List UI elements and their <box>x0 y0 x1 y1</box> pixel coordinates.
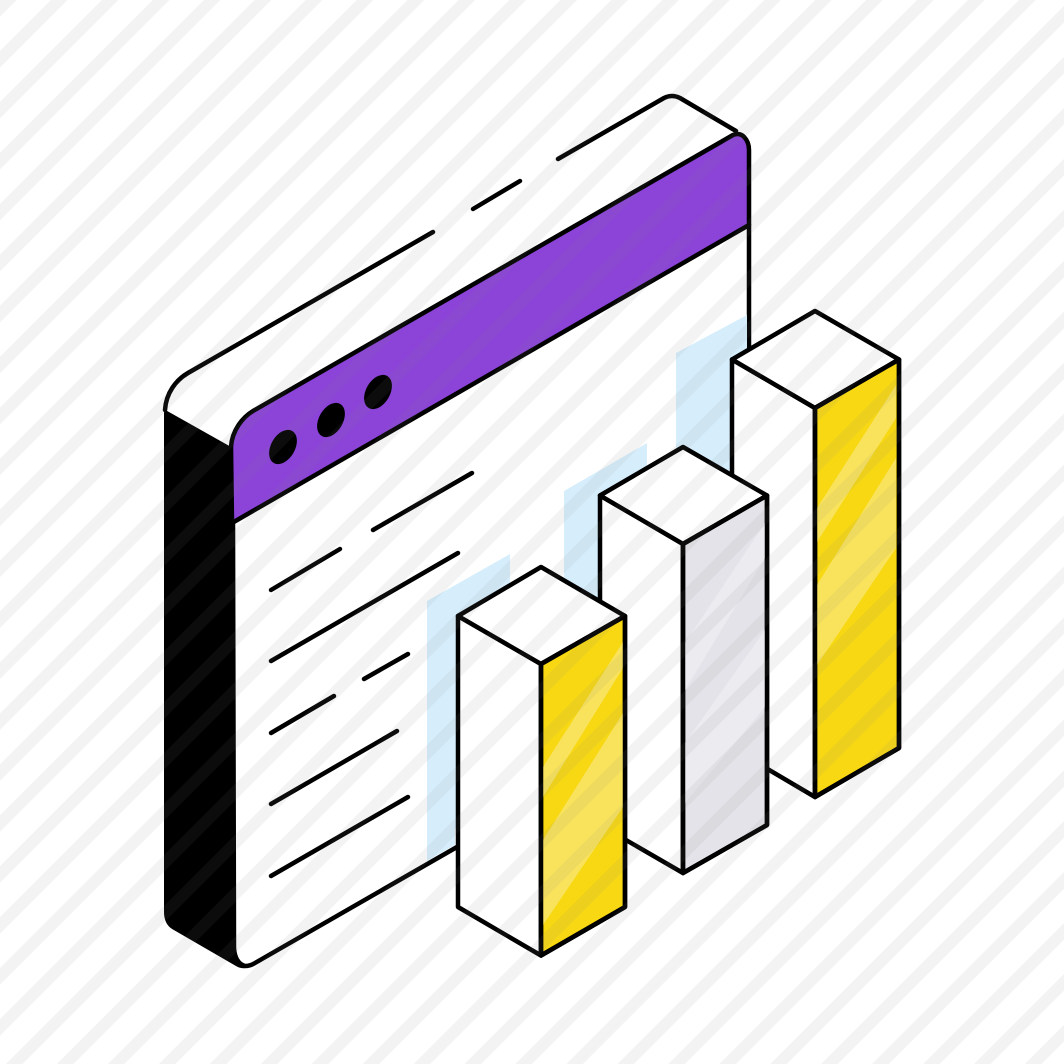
bar 1 top face <box>458 567 625 664</box>
browser window <box>164 96 749 968</box>
bar 2 top face <box>600 447 767 544</box>
window title bar <box>231 134 749 523</box>
window dots <box>263 370 398 469</box>
bar 2 left face <box>600 496 683 873</box>
text lines <box>271 473 472 876</box>
bar shadows <box>427 315 747 861</box>
bar 3 right face <box>815 360 899 797</box>
bar 1 left face <box>458 616 541 956</box>
bar 2 right face <box>683 496 767 873</box>
bar 1 right face <box>541 616 625 956</box>
bar 2 <box>600 447 767 873</box>
bar 3 <box>732 311 899 797</box>
window side face <box>164 410 245 968</box>
bar 3 left face <box>732 360 815 797</box>
window body outline <box>233 225 749 966</box>
bar 3 top face <box>732 311 899 408</box>
window top edge <box>165 96 736 410</box>
bar 1 <box>458 567 625 956</box>
